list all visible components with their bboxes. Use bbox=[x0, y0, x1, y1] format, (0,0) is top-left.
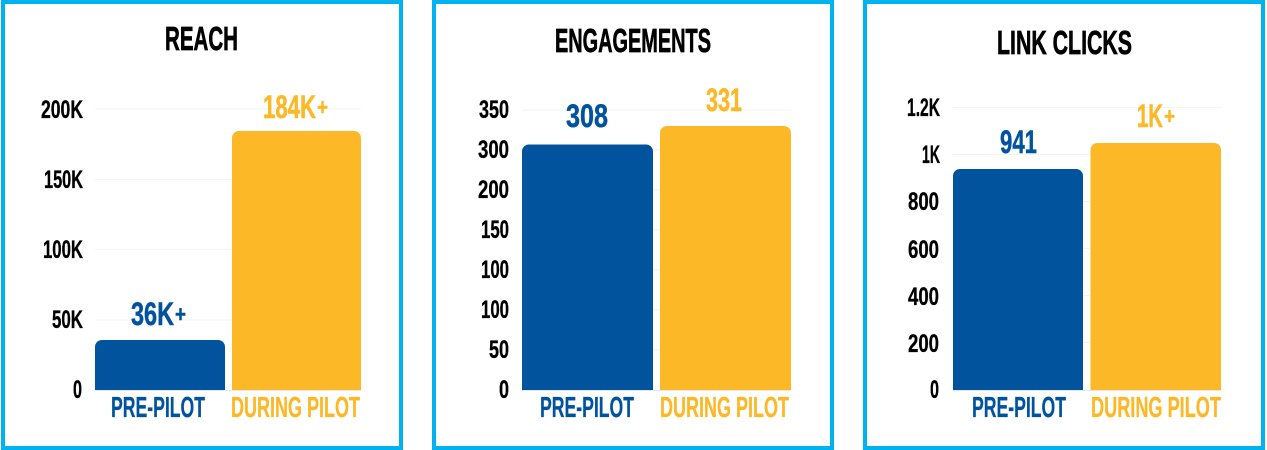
y axis: link clicks: 600 bbox=[908, 236, 939, 264]
x label: reach pre-pilot: PRE-PILOT bbox=[111, 392, 205, 424]
title: reach: REACH bbox=[165, 20, 238, 57]
y axis: link clicks: 1K bbox=[922, 141, 940, 169]
x label: reach during pilot: DURING PILOT bbox=[231, 392, 360, 424]
y axis: engagements: 100 bbox=[481, 256, 509, 284]
y axis: reach: 0 bbox=[73, 376, 82, 404]
bar: link clicks during pilot bbox=[1090, 143, 1221, 390]
y axis: reach: 150K bbox=[44, 166, 83, 194]
x label: link clicks pre-pilot: PRE-PILOT bbox=[972, 392, 1066, 424]
y axis: link clicks: 1.2K bbox=[907, 94, 940, 122]
title: link clicks: LINK CLICKS bbox=[997, 24, 1132, 61]
x label: engagements pre-pilot: PRE-PILOT bbox=[540, 392, 634, 424]
y axis: link clicks: 0 bbox=[930, 376, 939, 404]
y axis: reach: 100K bbox=[43, 236, 83, 264]
value: link clicks during pilot: + bbox=[1164, 103, 1175, 129]
y axis: link clicks: 800 bbox=[908, 188, 939, 216]
bar: reach during pilot bbox=[232, 131, 361, 390]
panel: reach bbox=[3, 2, 401, 448]
value: engagements pre-pilot: 308 bbox=[566, 98, 608, 134]
y axis: reach bbox=[41, 96, 83, 404]
y axis: link clicks: 400 bbox=[908, 283, 939, 311]
y axis: link clicks: 200 bbox=[908, 330, 939, 358]
y axis: engagements: 300 bbox=[478, 136, 509, 164]
value: engagements during pilot: 331 bbox=[706, 82, 742, 118]
y axis: link clicks bbox=[907, 94, 940, 404]
title: engagements: ENGAGEMENTS bbox=[555, 22, 711, 59]
y axis: engagements bbox=[478, 96, 509, 404]
bar: engagements during pilot bbox=[660, 126, 791, 390]
value: reach during pilot: 184K bbox=[263, 89, 316, 125]
y axis: engagements: 100 bbox=[481, 296, 509, 324]
y axis: engagements: 150 bbox=[481, 216, 509, 244]
x label: engagements during pilot: DURING PILOT bbox=[660, 392, 789, 424]
value: link clicks during pilot: 1K bbox=[1137, 98, 1163, 134]
y axis: engagements: 200 bbox=[478, 176, 509, 204]
bar: link clicks pre-pilot bbox=[953, 169, 1083, 390]
value: reach pre-pilot: + bbox=[175, 301, 186, 327]
y axis: engagements: 350 bbox=[479, 96, 509, 124]
value: reach pre-pilot: 36K bbox=[131, 296, 174, 332]
y axis: reach: 50K bbox=[52, 306, 83, 334]
bar: reach pre-pilot bbox=[95, 340, 225, 390]
value: link clicks pre-pilot: 941 bbox=[1000, 124, 1037, 160]
panel: engagements bbox=[434, 2, 832, 448]
y axis: engagements: 50 bbox=[489, 336, 509, 364]
panel: link clicks bbox=[865, 2, 1263, 448]
value: reach during pilot: + bbox=[317, 94, 328, 120]
y axis: engagements: 0 bbox=[499, 376, 509, 404]
y axis: reach: 200K bbox=[41, 96, 83, 124]
bar: engagements pre-pilot bbox=[522, 144, 653, 390]
